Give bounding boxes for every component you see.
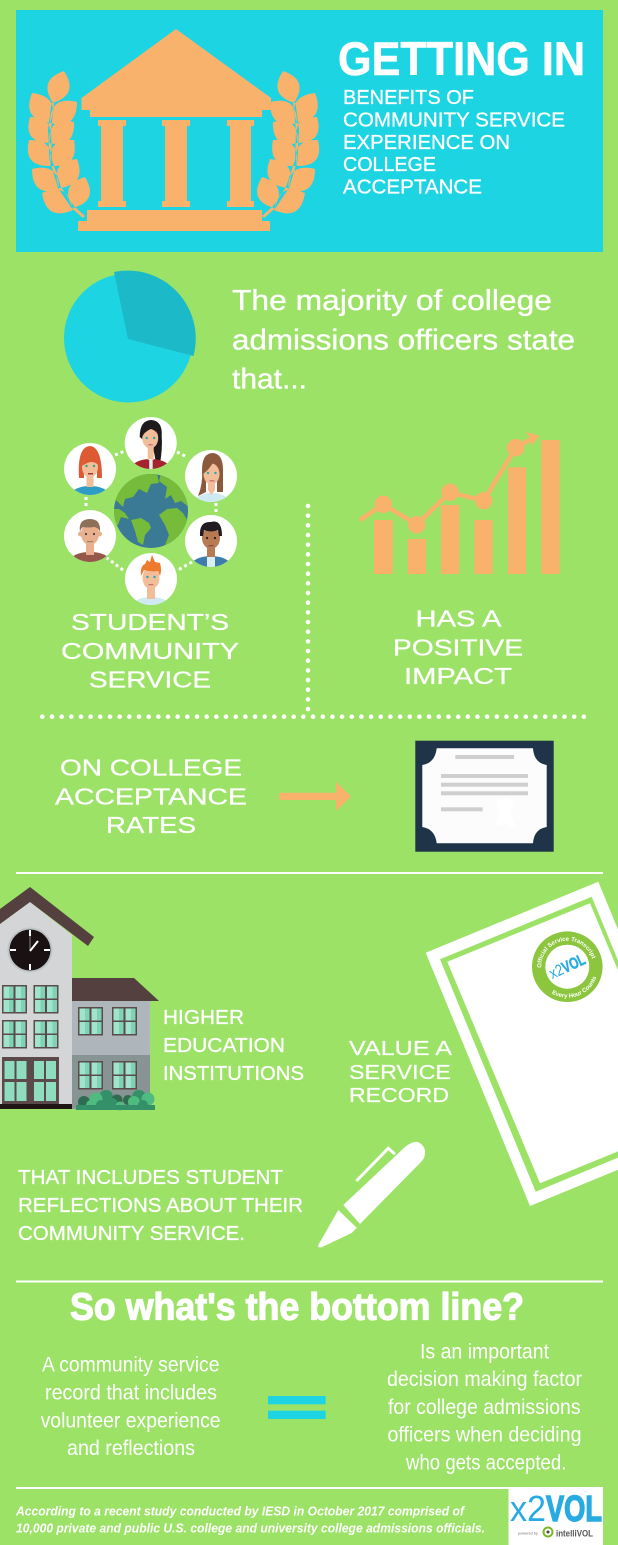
icon: people around the globe — [64, 417, 237, 613]
text: includes student reflections: THAT INCLUDES STUDENT — [18, 1167, 283, 1189]
title: GETTING IN — [338, 32, 585, 85]
text: right statement: decision making factor — [387, 1368, 582, 1391]
text: higher education institutions: HIGHER — [163, 1007, 244, 1029]
icon: certificate — [415, 741, 554, 852]
text: on college acceptance rates: RATES — [106, 812, 196, 838]
text: higher education institutions: INSTITUTIONS — [163, 1063, 304, 1085]
text: majority statement: that... — [232, 364, 307, 396]
subtitle — [343, 87, 565, 198]
text: includes student reflections: REFLECTIONS ABOUT THEIR — [18, 1195, 303, 1217]
globe — [111, 473, 191, 548]
text: right statement: Is an important — [420, 1340, 549, 1363]
icon: school building — [0, 887, 159, 1110]
text: has a positive impact — [393, 606, 523, 689]
text: right statement: for college admissions — [388, 1396, 581, 1419]
seal: Official Service Transcript — [537, 936, 596, 968]
text: includes student reflections — [18, 1167, 303, 1245]
text: value a service record — [349, 1038, 453, 1107]
text: value a service record: RECORD — [349, 1085, 449, 1107]
logo: x2VOL: VOL — [546, 1488, 602, 1529]
text: right statement — [387, 1340, 582, 1474]
chart: pie — [64, 271, 196, 402]
text: higher education institutions: EDUCATION — [163, 1035, 285, 1057]
person: top — [124, 417, 177, 469]
heading: bottom line: So what's the bottom line? — [70, 1286, 524, 1328]
subtitle: BENEFITS OF — [343, 87, 474, 109]
text: source note: 10,000 private and public U.S. college and university college admissions officials. — [16, 1522, 485, 1536]
text: left statement: A community service — [42, 1354, 220, 1377]
icon: temple with laurels — [28, 29, 319, 231]
door — [2, 1057, 59, 1104]
icon: equals sign — [268, 1396, 326, 1419]
seal — [532, 931, 603, 1002]
logo: x2VOL: intelliVOL — [556, 1528, 593, 1538]
text: left statement: record that includes — [45, 1381, 217, 1404]
text: majority statement: admissions officers state — [232, 324, 575, 356]
person: upper left — [64, 443, 116, 495]
person: lower left — [64, 510, 116, 562]
logo: x2VOL — [508, 1488, 603, 1545]
text: student's community service: STUDENT’S — [71, 609, 229, 635]
text: on college acceptance rates: ACCEPTANCE — [55, 783, 247, 809]
logo: x2VOL: powered by — [518, 1530, 538, 1536]
text: student's community service: COMMUNITY — [61, 638, 239, 664]
bushes — [76, 1090, 155, 1110]
clock — [8, 928, 52, 972]
subtitle: ACCEPTANCE — [343, 176, 482, 198]
text: on college acceptance rates — [55, 755, 247, 838]
text: majority statement: The majority of college — [232, 285, 552, 317]
person: upper right — [185, 450, 237, 502]
text: left statement: and reflections — [67, 1437, 195, 1460]
text: has a positive impact: IMPACT — [404, 663, 512, 689]
text: on college acceptance rates: ON COLLEGE — [60, 755, 242, 781]
text: right statement: who gets accepted. — [405, 1451, 566, 1474]
subtitle: COMMUNITY SERVICE — [343, 110, 565, 132]
arrow — [279, 782, 351, 811]
text: value a service record: SERVICE — [349, 1062, 451, 1084]
text: right statement: officers when deciding — [388, 1423, 582, 1446]
person: lower right — [185, 515, 237, 567]
text: source note — [15, 1504, 485, 1536]
subtitle: EXPERIENCE ON — [343, 132, 510, 154]
text: student's community service: SERVICE — [89, 666, 211, 692]
person: bottom — [125, 553, 177, 605]
icon: service record document — [426, 882, 618, 1206]
text: source note: According to a recent study conducted by IESD in October 2017 comprised of — [15, 1504, 466, 1518]
text: majority statement — [232, 285, 575, 396]
seal: VOL — [559, 951, 588, 977]
text: higher education institutions — [163, 1007, 304, 1085]
panel: header banner — [16, 10, 603, 252]
text: left statement — [41, 1354, 221, 1460]
text: left statement: volunteer experience — [41, 1409, 221, 1432]
seal: x2 — [547, 962, 567, 983]
text: student's community service — [61, 609, 239, 692]
text: includes student reflections: COMMUNITY SERVICE. — [18, 1223, 245, 1245]
text: has a positive impact: POSITIVE — [393, 635, 523, 661]
icon: pen — [318, 1142, 425, 1247]
text: has a positive impact: HAS A — [416, 606, 502, 632]
text: value a service record: VALUE A — [349, 1038, 453, 1060]
connecting dots — [86, 451, 216, 570]
subtitle: COLLEGE — [343, 154, 436, 176]
chart: rising bars and trend line — [360, 432, 560, 574]
logo: x2VOL: x2 — [510, 1488, 546, 1529]
seal: Every Hour Counts — [552, 976, 596, 999]
